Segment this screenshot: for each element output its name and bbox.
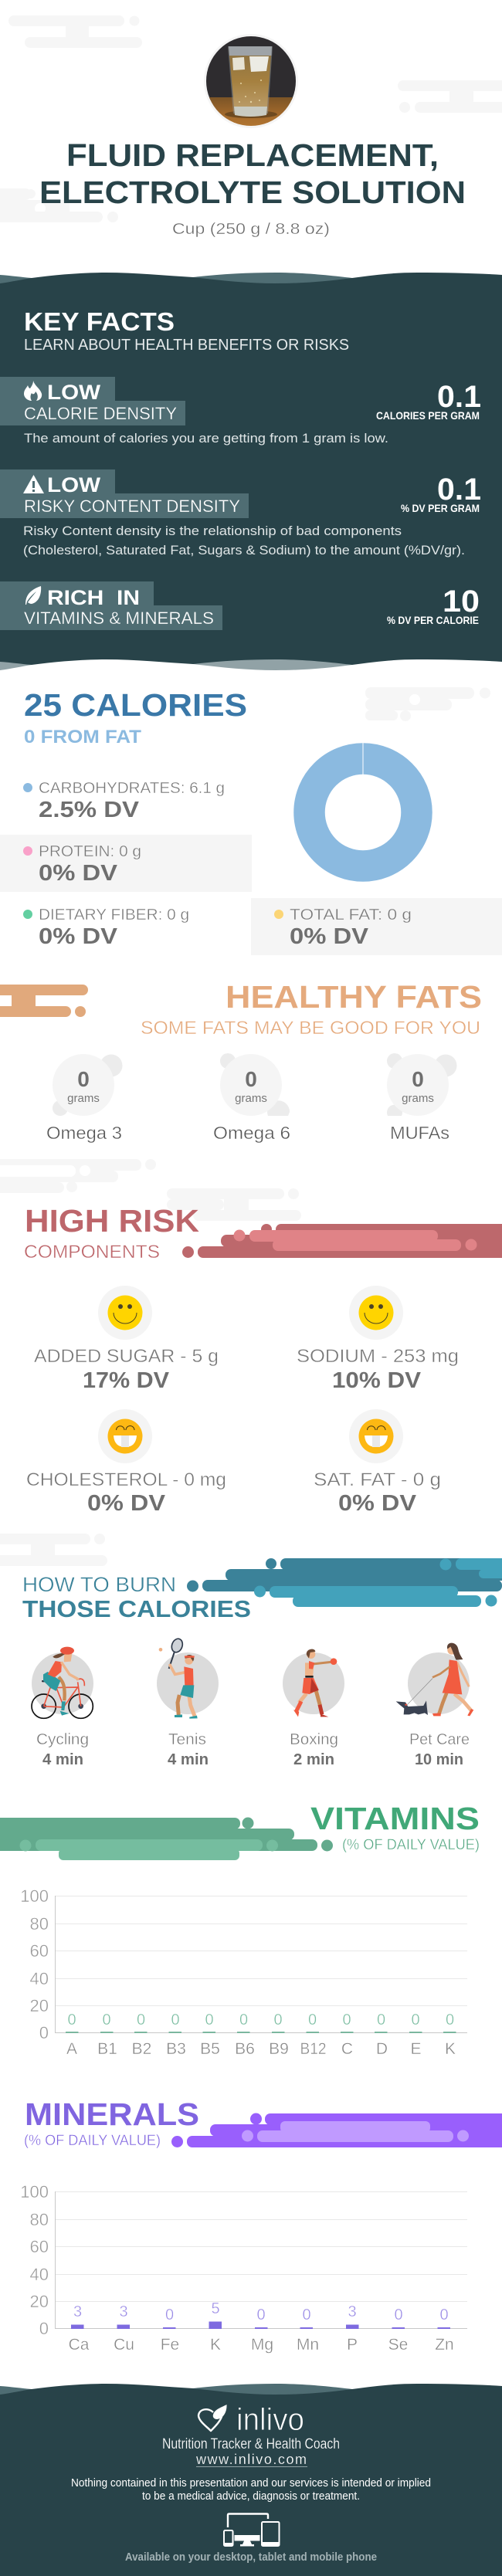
title: [39, 137, 466, 210]
food photo: glass of electrolyte drink: [204, 34, 298, 128]
legend: total fat: 0% DV: [290, 924, 369, 949]
high risk heading: COMPONENTS: [24, 1242, 160, 1263]
risk item: cholesterol: 0% DV: [87, 1491, 166, 1516]
background decoration: burn cloud: [0, 1534, 107, 1566]
bar chart: vitamins: 0: [102, 2012, 111, 2029]
logo: inlivo: inlivo: [236, 2401, 304, 2437]
bar chart: minerals: 0: [39, 2319, 49, 2338]
activity: pet care: [396, 1643, 473, 1768]
legend: dietary fiber: DIETARY FIBER: 0 g: [39, 907, 189, 924]
bar chart: vitamins: C: [341, 2040, 353, 2058]
fat item: omega 6: [213, 1053, 290, 1143]
risk item: added sugar: 17% DV: [83, 1368, 170, 1393]
bar chart: vitamins: B9: [269, 2040, 289, 2058]
bar chart: vitamins: 0: [446, 2012, 454, 2029]
fact: low calorie density: The amount of calories you are getting from 1 gram is low.: [24, 431, 388, 446]
bar chart: minerals: 0: [165, 2307, 174, 2323]
risk item: added sugar: ADDED SUGAR - 5 g: [34, 1346, 219, 1367]
bar chart: vitamins: 0: [411, 2012, 420, 2029]
bar chart: minerals: Ca: [69, 2336, 90, 2354]
fact: low risky content density: Risky Content density is the relationship of bad components: [23, 524, 402, 538]
calories heading: 0 FROM FAT: [24, 727, 141, 747]
key facts heading: [24, 307, 349, 354]
background decoration: header clouds: [0, 15, 502, 222]
bar chart: vitamins: [20, 1886, 467, 2058]
activity: cycling: Cycling: [36, 1731, 89, 1748]
vitamins heading: [310, 1801, 480, 1853]
bar chart: vitamins: B6: [235, 2040, 255, 2058]
title: ELECTROLYTE SOLUTION: [39, 175, 466, 210]
bar chart: vitamins: D: [376, 2040, 388, 2058]
bar chart: minerals: 3: [348, 2303, 357, 2320]
availability note: Available on your desktop, tablet and mobile phone: [125, 2551, 377, 2564]
fat item: MUFAs: 0: [412, 1067, 424, 1091]
fat item: omega 6: Omega 6: [213, 1123, 290, 1143]
bar chart: minerals: 5: [211, 2300, 220, 2317]
legend: total fat: TOTAL FAT: 0 g: [290, 907, 412, 924]
legend: protein: 0% DV: [39, 861, 118, 886]
high risk heading: HIGH RISK: [25, 1203, 199, 1239]
bar chart: minerals: 100: [20, 2182, 49, 2201]
footer tagline and url: [162, 2436, 340, 2467]
activity: cycling: 4 min: [42, 1751, 83, 1768]
high risk heading: [24, 1203, 199, 1263]
panel: key facts background with waves: [0, 273, 502, 680]
fact: low risky content density: LOW: [47, 473, 101, 497]
bar chart: vitamins: 0: [171, 2012, 180, 2029]
fact: rich in vitamins and minerals: 10: [443, 585, 480, 619]
risk item: sodium: SODIUM - 253 mg: [297, 1346, 459, 1367]
bar chart: vitamins: B12: [300, 2040, 326, 2058]
legend: carbohydrates: 2.5% DV: [39, 798, 140, 822]
logo: inlivo: [198, 2401, 304, 2437]
healthy fats heading: [141, 979, 482, 1039]
legend: carbohydrates: CARBOHYDRATES: 6.1 g: [39, 780, 225, 797]
bar chart: vitamins: 0: [205, 2012, 214, 2029]
bar chart: vitamins: 0: [67, 2012, 76, 2029]
vitamins banner: [0, 1818, 333, 1860]
activity: boxing: 2 min: [293, 1751, 334, 1768]
risk item: cholesterol: [26, 1409, 226, 1516]
bar chart: minerals: 3: [73, 2303, 82, 2320]
serving size: Cup (250 g / 8.8 oz): [172, 221, 330, 238]
bar chart: minerals: 3: [119, 2303, 128, 2320]
donut chart: calorie sources: [309, 742, 417, 866]
bar chart: minerals: 0: [439, 2307, 449, 2323]
fat item: MUFAs: grams: [402, 1092, 434, 1105]
activity: boxing: Boxing: [290, 1731, 338, 1748]
activity: pet care: 10 min: [415, 1751, 463, 1768]
bar chart: minerals: [20, 2182, 467, 2354]
bar chart: minerals: 0: [394, 2307, 403, 2323]
risk item: sodium: [297, 1286, 459, 1393]
bar chart: vitamins: 0: [273, 2012, 283, 2029]
fat item: omega 6: grams: [235, 1092, 267, 1105]
bar chart: vitamins: B2: [132, 2040, 151, 2058]
bar chart: minerals: 60: [30, 2237, 49, 2256]
fact: low risky content density: % DV PER GRAM: [401, 502, 480, 514]
fact: low calorie density: [0, 377, 481, 446]
fact: low calorie density: CALORIES PER GRAM: [376, 409, 480, 422]
figure: tennis player: [157, 1637, 219, 1719]
fat item: omega 3: [46, 1054, 122, 1143]
bar chart: minerals: 0: [302, 2307, 311, 2323]
healthy fats banner: [0, 985, 88, 1017]
burn banner: [187, 1558, 502, 1607]
footer tagline and url: Nutrition Tracker & Health Coach: [162, 2436, 340, 2452]
bar chart: minerals: 20: [30, 2292, 49, 2311]
title: FLUID REPLACEMENT,: [66, 137, 439, 173]
bar chart: minerals: K: [210, 2336, 221, 2354]
fact: rich in vitamins and minerals: VITAMINS & MINERALS: [24, 608, 214, 628]
bar chart: vitamins: 0: [39, 2023, 49, 2042]
icon: leaf: [25, 586, 41, 605]
bar chart: vitamins: 0: [377, 2012, 385, 2029]
activity: tennis: [157, 1637, 219, 1768]
figure: boxer: [283, 1649, 344, 1717]
bar chart: vitamins: 0: [308, 2012, 317, 2029]
icon: smiling face: [358, 1296, 394, 1330]
legend: protein: PROTEIN: 0 g: [39, 843, 141, 860]
fat item: MUFAs: MUFAs: [390, 1123, 449, 1143]
disclaimer: to be a medical advice, diagnosis or treatment.: [142, 2490, 360, 2503]
minerals heading: [24, 2096, 199, 2149]
risk item: saturated fat: SAT. FAT - 0 g: [314, 1469, 441, 1490]
fact: rich in vitamins and minerals: % DV PER CALORIE: [387, 614, 479, 626]
panel: footer background with waves: [0, 2384, 502, 2576]
legend: carbohydrates: [23, 780, 225, 822]
background decoration: high risk clouds: [0, 1159, 301, 1221]
minerals heading: (% OF DAILY VALUE): [24, 2132, 161, 2149]
bar chart: vitamins: 0: [137, 2012, 145, 2029]
bar chart: vitamins: A: [66, 2040, 77, 2058]
legend: dietary fiber: [23, 907, 189, 949]
bar chart: minerals: P: [347, 2336, 358, 2354]
activity: cycling: [32, 1647, 93, 1768]
bar chart: vitamins: K: [445, 2040, 456, 2058]
vitamins heading: VITAMINS: [310, 1801, 480, 1836]
bar chart: vitamins: 0: [342, 2012, 351, 2029]
activity: pet care: Pet Care: [409, 1731, 470, 1748]
fact: low calorie density: LOW: [47, 381, 101, 404]
bar chart: minerals: 40: [30, 2265, 49, 2284]
fact: low calorie density: CALORIE DENSITY: [24, 404, 177, 423]
icon: flame: [24, 381, 42, 401]
disclaimer: [71, 2476, 431, 2503]
activity: tennis: 4 min: [168, 1751, 209, 1768]
bar chart: minerals: 0: [256, 2307, 266, 2323]
bar chart: vitamins: 60: [30, 1941, 49, 1961]
fact: low risky content density: (Cholesterol, Saturated Fat, Sugars & Sodium) to the amount (%DV/gr).: [23, 543, 465, 558]
bar chart: vitamins: 0: [239, 2012, 248, 2029]
key facts heading: KEY FACTS: [24, 307, 175, 336]
fact: low calorie density: 0.1: [437, 380, 481, 414]
bar chart: minerals: 80: [30, 2210, 49, 2229]
bar chart: minerals: Mn: [297, 2336, 319, 2354]
figure: cyclist: [32, 1647, 93, 1718]
bar chart: minerals: Se: [388, 2336, 408, 2354]
icon: grinning face: [358, 1419, 394, 1453]
icon: grinning face: [108, 1419, 142, 1453]
fact: rich in vitamins and minerals: [0, 581, 480, 630]
minerals banner: [171, 2113, 502, 2147]
icon: heart with leaf: [198, 2405, 227, 2431]
risk item: saturated fat: [314, 1409, 441, 1516]
risk item: added sugar: [34, 1286, 219, 1393]
fat item: MUFAs: [387, 1053, 457, 1143]
calories heading: 25 CALORIES: [24, 687, 247, 723]
risk item: saturated fat: 0% DV: [338, 1491, 417, 1516]
bar chart: minerals: Zn: [435, 2336, 454, 2354]
bar chart: vitamins: 20: [30, 1996, 49, 2015]
background decoration: calories cloud: [365, 687, 490, 721]
fat item: omega 3: Omega 3: [46, 1123, 122, 1143]
bar chart: vitamins: 80: [30, 1914, 49, 1934]
disclaimer: Nothing contained in this presentation and our services is intended or implied: [71, 2476, 431, 2490]
burn heading: [22, 1573, 251, 1622]
fact: low risky content density: [0, 469, 481, 558]
legend: total fat: [251, 898, 502, 955]
bar chart: minerals: Cu: [114, 2336, 134, 2354]
vitamins heading: (% OF DAILY VALUE): [342, 1836, 480, 1853]
bar chart: vitamins: B3: [166, 2040, 186, 2058]
fact: low risky content density: 0.1: [437, 473, 481, 507]
bar chart: vitamins: B1: [97, 2040, 117, 2058]
figure: woman walking dog: [396, 1643, 473, 1716]
fact: low risky content density: RISKY CONTENT DENSITY: [24, 497, 240, 516]
bar chart: vitamins: 100: [20, 1886, 49, 1906]
risk item: sodium: 10% DV: [332, 1368, 422, 1393]
activity: tennis: Tenis: [168, 1731, 206, 1748]
legend: dietary fiber: 0% DV: [39, 924, 118, 949]
high risk banner: [182, 1224, 502, 1258]
bar chart: vitamins: B5: [200, 2040, 220, 2058]
icon: warning triangle: [23, 475, 44, 493]
calories heading: [24, 687, 247, 747]
icon: desktop, tablet and phone: [224, 2514, 280, 2547]
minerals heading: MINERALS: [25, 2096, 199, 2132]
burn heading: HOW TO BURN: [22, 1573, 176, 1596]
bar chart: vitamins: E: [410, 2040, 422, 2058]
fat item: omega 3: grams: [67, 1092, 100, 1105]
footer tagline and url: www.inlivo.com: [195, 2452, 307, 2467]
lower wave of key facts panel: [0, 659, 502, 696]
healthy fats heading: HEALTHY FATS: [226, 979, 482, 1015]
key facts heading: LEARN ABOUT HEALTH BENEFITS OR RISKS: [24, 337, 349, 354]
bar chart: minerals: Mg: [251, 2336, 273, 2354]
healthy fats heading: SOME FATS MAY BE GOOD FOR YOU: [141, 1018, 480, 1039]
fat item: omega 3: 0: [77, 1067, 90, 1091]
fact: rich in vitamins and minerals: RICH IN: [47, 586, 140, 609]
legend: protein: [0, 835, 252, 892]
activity: boxing: [283, 1649, 344, 1768]
risk item: cholesterol: CHOLESTEROL - 0 mg: [26, 1469, 226, 1490]
fat item: omega 6: 0: [245, 1067, 257, 1091]
icon: smiling face: [108, 1296, 142, 1330]
bar chart: minerals: Fe: [161, 2336, 179, 2354]
burn heading: THOSE CALORIES: [22, 1595, 251, 1622]
bar chart: vitamins: 40: [30, 1969, 49, 1988]
